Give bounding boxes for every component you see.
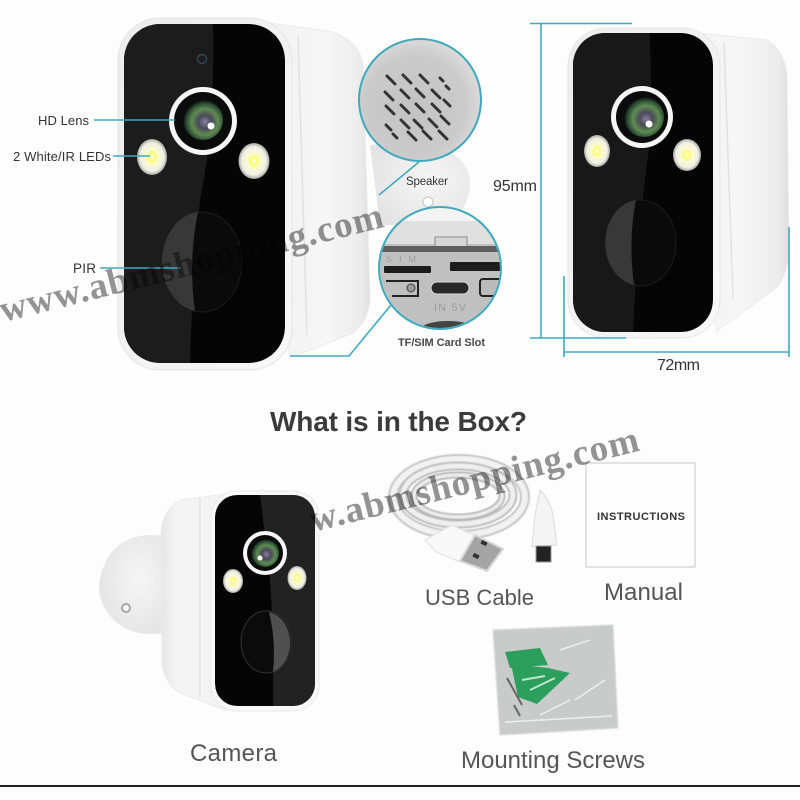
black front panel	[124, 24, 285, 363]
label: PIR: PIR	[73, 261, 96, 276]
box item: manual	[586, 463, 695, 606]
dimension: height	[493, 24, 632, 338]
label: TF/SIM Card Slot: TF/SIM Card Slot	[398, 337, 485, 349]
plastic bag	[493, 625, 618, 735]
box item: camera	[100, 491, 319, 767]
anchors	[505, 648, 570, 704]
main camera with feature callouts	[13, 18, 470, 370]
pointer: LEDs	[113, 155, 150, 157]
speaker circle	[359, 39, 481, 161]
watermark lower: w.abmshopping.com	[305, 419, 643, 541]
slot photo: SIM	[386, 254, 416, 264]
slot ring	[379, 207, 501, 329]
box item: mounting screws	[461, 625, 645, 774]
label: Speaker: Speaker	[406, 176, 448, 188]
body seam	[724, 42, 733, 298]
watermark upper: www.abmshopping.com	[0, 196, 388, 331]
anchor highlights	[522, 676, 555, 690]
label: Camera: Camera	[190, 740, 278, 767]
slot photo: IN 5V	[434, 302, 467, 314]
lens	[611, 86, 673, 148]
footer rule	[0, 785, 800, 787]
LED left	[137, 139, 167, 175]
label: HD Lens: HD Lens	[38, 113, 90, 128]
bracket	[100, 535, 165, 634]
label: LEDs: 2 White/IR LEDs	[13, 149, 112, 164]
heading: What is in the Box?	[270, 406, 527, 437]
camera body	[250, 20, 370, 358]
wall bracket behind speaker callout	[370, 143, 470, 225]
pointer: PIR	[100, 267, 181, 269]
card slot callout	[290, 207, 502, 356]
screws	[507, 678, 522, 716]
body seam	[298, 36, 307, 335]
cable coil	[393, 459, 525, 535]
pointer: HD Lens	[94, 119, 175, 121]
label: Manual: Manual	[604, 579, 683, 606]
PIR	[241, 611, 291, 673]
bracket screw	[122, 604, 130, 612]
slot photo	[380, 208, 500, 328]
black panel	[215, 495, 315, 706]
LED right	[288, 566, 306, 590]
body	[161, 494, 225, 710]
front shell	[568, 28, 720, 338]
manual page	[586, 463, 695, 567]
manual text: INSTRUCTIONS	[597, 511, 685, 523]
speaker grille	[385, 75, 450, 140]
lens	[243, 531, 287, 575]
mounting hole	[423, 197, 433, 207]
PIR	[605, 200, 676, 286]
dimension: width	[564, 227, 789, 374]
PIR sensor	[162, 212, 242, 312]
label: USB Cable: USB Cable	[425, 585, 534, 610]
LED right	[238, 143, 270, 179]
label: 95mm: 95mm	[493, 178, 537, 195]
speaker callout	[359, 39, 481, 195]
camera front shell	[118, 18, 292, 370]
USB-C plug	[532, 490, 557, 562]
bag wrinkles	[505, 640, 612, 722]
dimension camera	[568, 28, 789, 338]
body seam	[199, 498, 201, 698]
USB-A plug	[425, 525, 503, 571]
label: Mounting Screws: Mounting Screws	[461, 747, 645, 774]
slot pointer	[290, 305, 391, 356]
indicator light	[198, 54, 206, 64]
camera body	[650, 28, 789, 331]
LED left	[584, 135, 610, 167]
label: 72mm: 72mm	[657, 357, 700, 374]
black panel	[573, 33, 713, 332]
LED right	[673, 139, 701, 171]
speaker pointer	[379, 162, 419, 195]
LED left	[223, 569, 243, 593]
front shell	[211, 491, 319, 711]
box item: USB cable	[393, 459, 557, 610]
HD lens	[169, 87, 237, 155]
